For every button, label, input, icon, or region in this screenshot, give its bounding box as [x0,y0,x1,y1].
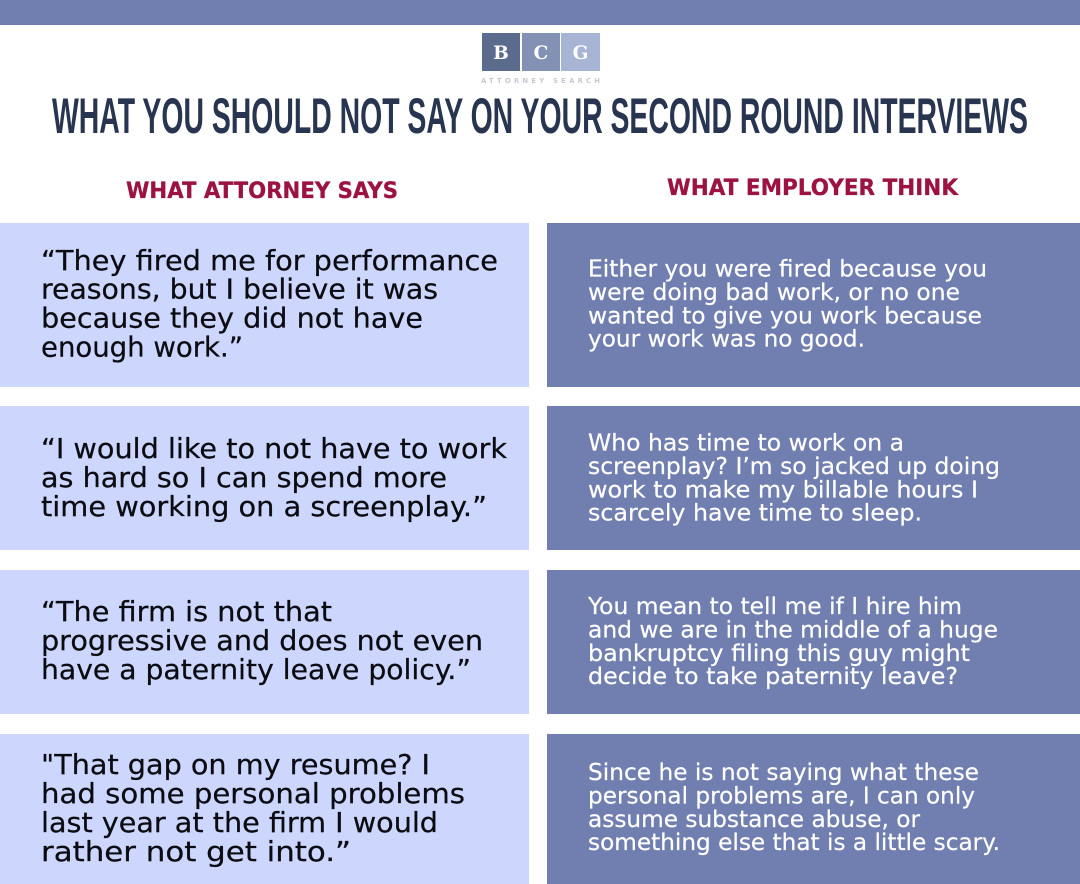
panel: attorney quote 3: “The firm is not that [41,595,332,628]
panel: attorney quote 1 [0,223,529,387]
panel: employer thought 2: Who has time to work on a [588,430,904,456]
panel: employer thought 1 [547,223,1080,387]
panel: attorney quote 1: reasons, but I believe it was [41,272,438,306]
panel: employer thought 4: Since he is not saying what these [588,760,979,786]
panel: attorney quote 3: progressive and does not even [41,624,483,657]
panel: employer thought 1: were doing bad work, or no one [588,280,960,306]
panel: employer thought 2: screenplay? I’m so jacked up doing [588,454,1000,480]
panel: attorney quote 3 [0,570,529,714]
heading: what employer think: WHAT EMPLOYER THINK [667,176,959,201]
panel: attorney quote 4: last year at the firm I would [41,806,438,839]
panel: employer thought 1: your work was no good. [588,326,865,352]
panel: employer thought 3: decide to take paternity leave? [588,664,958,690]
panel: employer thought 1: wanted to give you work because [588,304,982,330]
panel: employer thought 1: Either you were fired because you [588,256,987,282]
panel: attorney quote 4: rather not get into.” [41,835,351,868]
logo: BCG Attorney Search: G [573,43,588,64]
panel: attorney quote 2: as hard so I can spend more [41,461,447,494]
panel: attorney quote 1: enough work.” [41,330,243,364]
panel: employer thought 3: and we are in the middle of a huge [588,618,998,644]
panel: employer thought 3: bankruptcy filing this guy might [588,641,970,667]
panel: employer thought 4: personal problems are, I can only [588,784,975,810]
panel: attorney quote 1: “They fired me for performance [41,244,498,277]
panel: attorney quote 3: have a paternity leave policy.” [41,653,471,686]
panel: employer thought 3 [547,570,1080,714]
logo: BCG Attorney Search: B [493,43,509,64]
heading: what attorney says: WHAT ATTORNEY SAYS [126,179,398,204]
panel: employer thought 3: You mean to tell me if I hire him [587,594,962,620]
panel: employer thought 4: assume substance abuse, or [588,807,921,833]
logo: BCG Attorney Search: C [534,43,548,64]
logo: BCG Attorney Search [481,33,600,85]
logo: BCG Attorney Search: ATTORNEY SEARCH [481,77,600,85]
panel: attorney quote 4 [0,734,529,884]
panel: employer thought 2 [547,406,1080,550]
panel: employer thought 2: work to make my billable hours I [588,478,978,504]
panel: attorney quote 2: time working on a screenplay.” [41,490,487,523]
panel: attorney quote 2 [0,406,529,550]
panel: attorney quote 2: “I would like to not have to work [41,432,508,465]
top banner [0,0,1080,25]
panel: employer thought 4 [547,734,1080,884]
panel: employer thought 2: scarcely have time to sleep. [588,500,922,526]
panel: attorney quote 1: because they did not have [41,302,423,334]
panel: attorney quote 4: had some personal problems [41,777,465,810]
panel: employer thought 4: something else that is a little scary. [588,830,1000,856]
panel: attorney quote 4: "That gap on my resume? I [41,748,430,781]
